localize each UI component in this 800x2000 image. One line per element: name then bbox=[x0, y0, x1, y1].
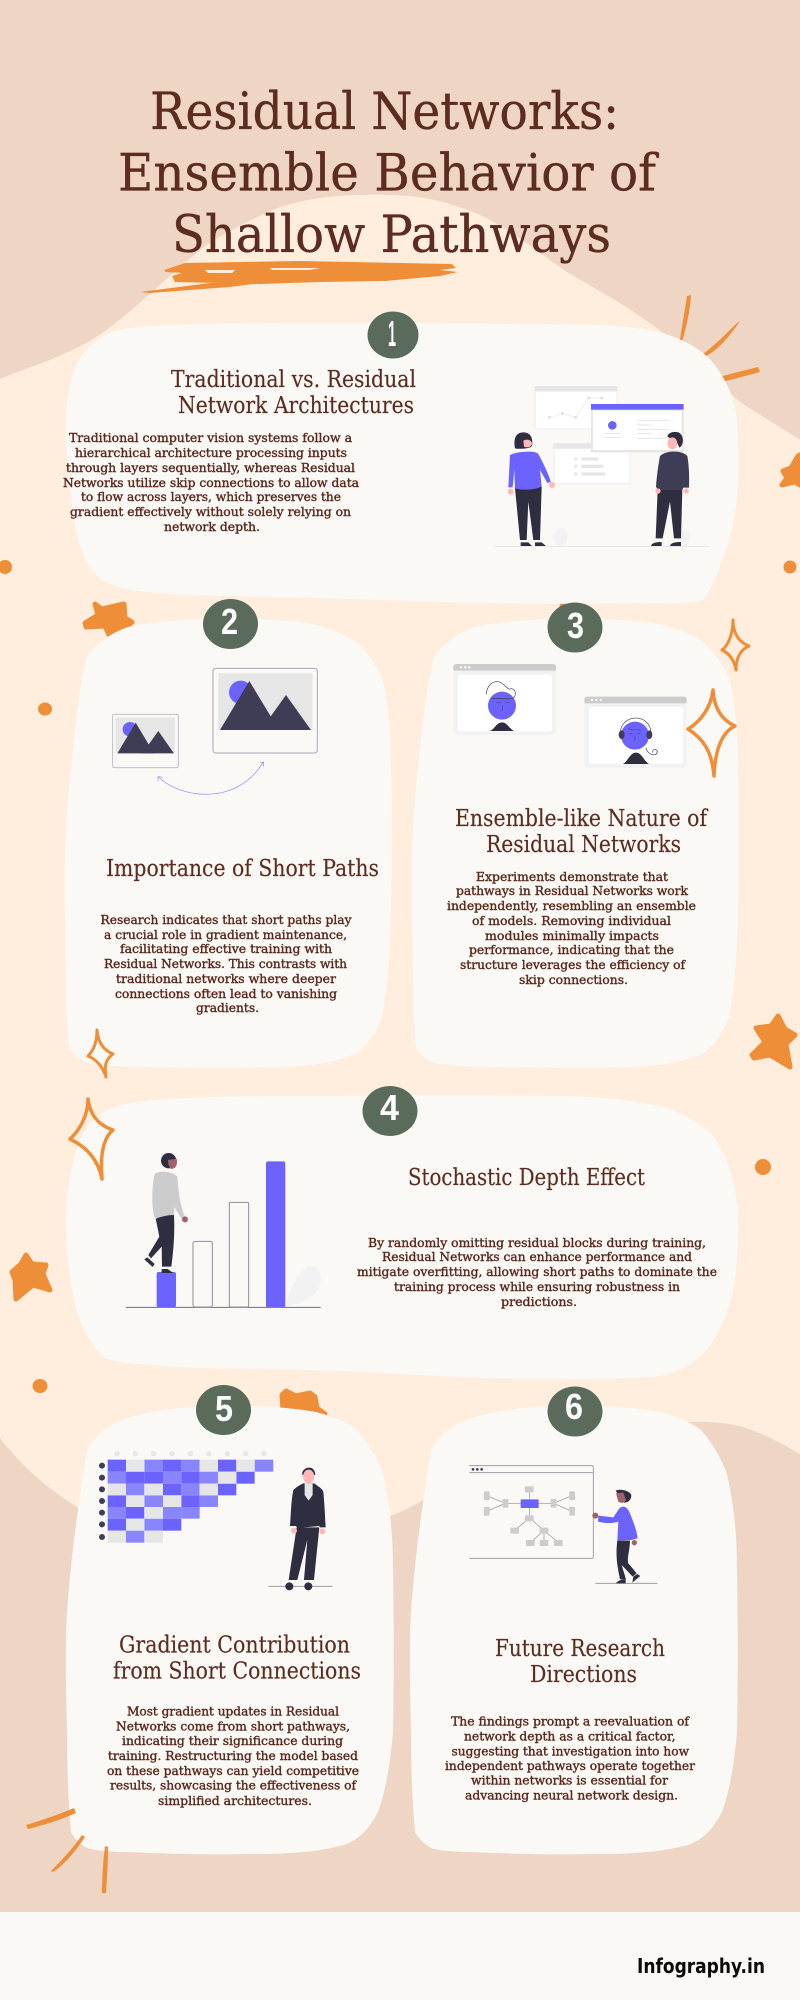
illustration: two people and dashboards bbox=[494, 386, 709, 547]
body text bbox=[357, 1236, 717, 1309]
decorative rays top right bbox=[680, 295, 760, 384]
heading: Gradient Contribution bbox=[119, 1632, 350, 1658]
body text: By randomly omitting residual blocks during training, bbox=[368, 1236, 706, 1250]
body text: indicating their significance during bbox=[122, 1734, 343, 1748]
panel: stochastic depth effect bbox=[66, 1086, 738, 1379]
number badge 5: 5 bbox=[215, 1388, 233, 1429]
body text: training process while ensuring robustness in bbox=[394, 1280, 680, 1294]
illustration: image frames with arrow bbox=[113, 668, 317, 794]
heading: from Short Connections bbox=[113, 1658, 361, 1684]
card background bbox=[65, 619, 392, 1068]
number badge 3: 3 bbox=[567, 605, 584, 646]
body text: gradients. bbox=[196, 1001, 259, 1015]
body text: connections often lead to vanishing bbox=[115, 987, 337, 1001]
body text: predictions. bbox=[501, 1295, 577, 1309]
body text: gradient effectively without solely relying on bbox=[70, 505, 351, 519]
body text: The findings prompt a reevaluation of bbox=[451, 1714, 691, 1728]
body text: training. Restructuring the model based bbox=[108, 1749, 358, 1763]
panel: traditional vs residual bbox=[63, 312, 738, 604]
body text: through layers sequentially, whereas Residual bbox=[66, 461, 355, 475]
body text: traditional networks where deeper bbox=[116, 972, 336, 986]
body text: structure leverages the efficiency of bbox=[460, 958, 687, 972]
body text: independently, resembling an ensemble bbox=[447, 899, 696, 913]
number badge 5 bbox=[196, 1385, 251, 1435]
body text: a crucial role in gradient maintenance, bbox=[104, 928, 347, 942]
number badge 4 bbox=[362, 1086, 418, 1136]
body text: Residual Networks. This contrasts with bbox=[104, 957, 347, 971]
panel: future research directions bbox=[410, 1386, 738, 1854]
footer logo text: Infography.in bbox=[637, 1954, 765, 1978]
number badge 1 bbox=[368, 312, 418, 358]
body text: Most gradient updates in Residual bbox=[127, 1704, 339, 1718]
decorative sparkles bbox=[70, 620, 749, 1179]
number badge 6: 6 bbox=[565, 1386, 583, 1427]
illustration: presenter with network diagram bbox=[469, 1466, 657, 1583]
panel: ensemble-like nature bbox=[412, 602, 739, 1068]
body text: facilitating effective training with bbox=[120, 942, 332, 956]
body text: performance, indicating that the bbox=[469, 943, 674, 957]
body text: within networks is essential for bbox=[471, 1774, 668, 1788]
heading: Future Research bbox=[495, 1636, 665, 1662]
heading: Stochastic Depth Effect bbox=[408, 1165, 646, 1191]
panel: gradient contribution bbox=[66, 1385, 394, 1854]
body text: network depth. bbox=[164, 520, 260, 534]
body text: independent pathways operate together bbox=[445, 1759, 695, 1773]
card background bbox=[66, 323, 739, 604]
body text bbox=[63, 431, 359, 534]
body text: pathways in Residual Networks work bbox=[456, 884, 689, 898]
heading bbox=[495, 1636, 665, 1688]
heading bbox=[113, 1632, 361, 1684]
number badge 2: 2 bbox=[221, 601, 238, 642]
heading: Importance of Short Paths bbox=[106, 856, 379, 882]
title: Ensemble Behavior of bbox=[118, 144, 659, 204]
body text: results, showcasing the effectiveness of bbox=[110, 1778, 358, 1792]
heading: Directions bbox=[530, 1662, 637, 1688]
body text bbox=[445, 1714, 695, 1802]
body text bbox=[107, 1704, 359, 1808]
body text: network depth as a critical factor, bbox=[464, 1730, 676, 1744]
number badge 6 bbox=[548, 1386, 602, 1436]
body text: Research indicates that short paths play bbox=[100, 913, 352, 927]
body text bbox=[100, 913, 352, 1015]
heading: Residual Networks bbox=[486, 832, 681, 858]
body text: Residual Networks can enhance performance and bbox=[382, 1250, 692, 1264]
illustration: video call windows bbox=[453, 664, 687, 768]
heading: Ensemble-like Nature of bbox=[455, 806, 708, 832]
body text: on these pathways can yield competitive bbox=[107, 1764, 359, 1778]
card background bbox=[66, 1406, 394, 1854]
body text: suggesting that investigation into how bbox=[452, 1744, 690, 1758]
body text: Experiments demonstrate that bbox=[476, 870, 668, 884]
body text: to flow across layers, which preserves the bbox=[81, 490, 341, 504]
heading: Traditional vs. Residual bbox=[171, 367, 416, 393]
title bbox=[118, 83, 659, 265]
body text: mitigate overfitting, allowing short paths to dominate the bbox=[357, 1265, 717, 1279]
title underline brush stroke bbox=[140, 261, 458, 293]
number badge 3 bbox=[548, 602, 602, 652]
number badge 1: 1 bbox=[388, 313, 396, 354]
illustration: person climbing bar chart bbox=[126, 1153, 321, 1307]
body text: skip connections. bbox=[519, 973, 628, 987]
number badge 2 bbox=[203, 599, 258, 649]
decorative orange dots bbox=[0, 560, 796, 1393]
heading bbox=[171, 367, 416, 419]
title: Residual Networks: bbox=[150, 83, 619, 142]
heading bbox=[455, 806, 708, 858]
body text: advancing neural network design. bbox=[465, 1788, 678, 1802]
body text: Networks utilize skip connections to allow data bbox=[63, 476, 359, 490]
card background bbox=[412, 619, 739, 1068]
panel: importance of short paths bbox=[65, 599, 392, 1068]
decorative rays bottom left bbox=[26, 1808, 108, 1893]
body text: Networks come from short pathways, bbox=[116, 1720, 350, 1734]
number badge 4: 4 bbox=[380, 1087, 399, 1128]
card background bbox=[410, 1406, 738, 1854]
body text: Traditional computer vision systems follow a bbox=[69, 431, 352, 445]
title: Shallow Pathways bbox=[172, 206, 611, 265]
body text: of models. Removing individual bbox=[472, 914, 671, 928]
body text: hierarchical architecture processing inputs bbox=[75, 446, 347, 460]
body text: modules minimally impacts bbox=[485, 929, 659, 943]
decorative orange stars behind cards bbox=[12, 452, 800, 1414]
illustration: heatmap and person in suit bbox=[99, 1451, 333, 1590]
card background bbox=[66, 1095, 738, 1379]
heading: Network Architectures bbox=[178, 393, 414, 419]
body text: simplified architectures. bbox=[158, 1794, 312, 1808]
body text bbox=[447, 870, 696, 987]
